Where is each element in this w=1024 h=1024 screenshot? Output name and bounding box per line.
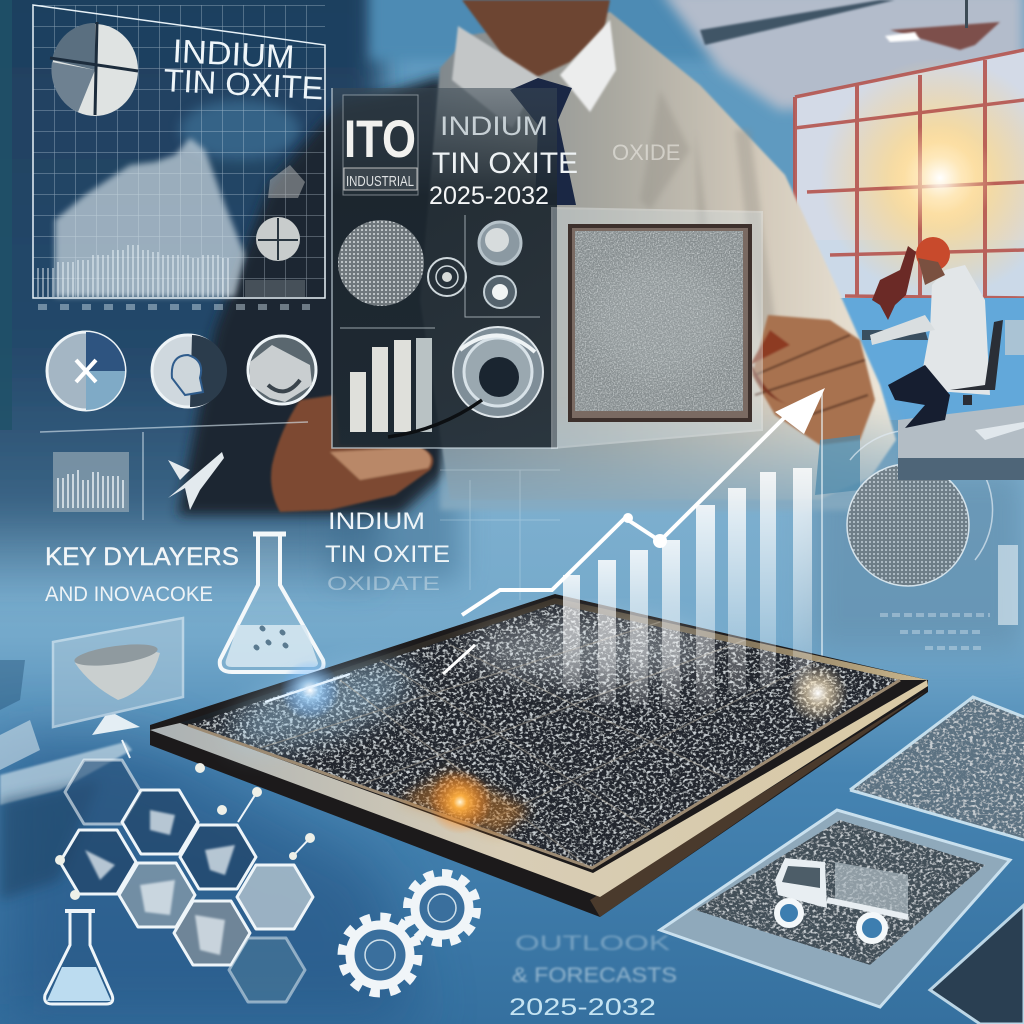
gears bbox=[342, 873, 477, 993]
axis labels bbox=[38, 304, 310, 310]
hexagon sample sketches bbox=[85, 810, 235, 955]
hexagon network bbox=[55, 740, 315, 1002]
central dark panel: TIN OXITE bbox=[432, 147, 578, 180]
pie disc bbox=[50, 22, 138, 116]
dark base bbox=[150, 594, 928, 917]
background researcher with microscope bbox=[862, 237, 1024, 480]
chart area bbox=[55, 138, 245, 297]
man in lab coat bbox=[178, 0, 900, 515]
panel lower right bbox=[930, 905, 1024, 1024]
mid label bbox=[325, 508, 450, 595]
panel upper right bbox=[850, 697, 1024, 840]
sleeve bbox=[870, 315, 935, 345]
mid label: TIN OXITE bbox=[325, 541, 450, 568]
small lenses bbox=[479, 222, 521, 264]
lens bbox=[453, 327, 543, 417]
truck icon bbox=[775, 858, 908, 941]
mid label: OXIDATE bbox=[327, 574, 440, 595]
ITO badge bbox=[343, 95, 418, 195]
key layers heading: KEY DYLAYERS bbox=[45, 543, 239, 571]
shirt collar bbox=[452, 26, 540, 128]
mid label: INDIUM bbox=[328, 508, 425, 535]
panel lines bbox=[340, 215, 540, 328]
left icon row bbox=[47, 332, 316, 410]
small flask bbox=[45, 911, 113, 1004]
cuff bbox=[815, 435, 860, 495]
top rim bbox=[180, 598, 928, 724]
growth chart glass bbox=[440, 390, 822, 680]
left lower panel with thumbnails bbox=[40, 422, 308, 520]
screen bbox=[188, 604, 900, 868]
chair bbox=[950, 320, 1003, 405]
person head bbox=[916, 237, 950, 271]
beige rim bbox=[150, 680, 928, 897]
panel truck inner bbox=[695, 820, 985, 965]
sleeve icon bbox=[245, 165, 305, 297]
central dark panel: 2025-2032 bbox=[429, 182, 549, 210]
lower hand holding stylus bbox=[271, 395, 433, 512]
outlook text bbox=[509, 932, 677, 1021]
outlook text: 2025-2032 bbox=[509, 994, 656, 1021]
outlook text: & FORECASTS bbox=[512, 964, 677, 987]
title: INDIUM bbox=[440, 111, 548, 141]
microscope bbox=[872, 246, 916, 320]
coat fold shading bbox=[640, 90, 775, 340]
plate blotch bbox=[590, 260, 730, 380]
dense bars bbox=[38, 245, 228, 297]
person body bbox=[918, 265, 990, 395]
left data panel grid chart bbox=[33, 5, 325, 307]
screen rim inner bbox=[188, 680, 900, 868]
fourth bar bbox=[416, 338, 432, 432]
stylus bbox=[388, 400, 482, 437]
tablet device bbox=[150, 594, 928, 917]
right mesh circle bbox=[847, 430, 993, 586]
screen light left bbox=[220, 645, 420, 765]
key layers heading bbox=[45, 543, 239, 606]
ITO sample glass plate bbox=[552, 208, 762, 448]
bar chart bbox=[350, 340, 411, 432]
mesh disc bbox=[338, 220, 424, 306]
flask bbox=[220, 534, 324, 672]
screen light centre bbox=[470, 618, 710, 682]
lens flares bbox=[265, 660, 848, 834]
heading: INDIUM bbox=[172, 32, 295, 75]
hazy lower coat fade bbox=[440, 400, 900, 510]
right side tube and faint formulas bbox=[880, 545, 1018, 648]
left lower strips bbox=[0, 660, 132, 900]
bottom edge right bbox=[590, 690, 928, 917]
left data panel grid chart: TIN OXITE bbox=[163, 62, 324, 106]
outlook text: OUTLOOK bbox=[515, 932, 670, 955]
central dark panel: OXIDE bbox=[612, 140, 680, 165]
skin neck and chin bbox=[462, 0, 610, 78]
key layers heading: AND INOVACOKE bbox=[45, 583, 213, 606]
right lower panels bbox=[660, 697, 1024, 1024]
central dark panel bbox=[332, 88, 680, 448]
growth arrow line bbox=[443, 388, 825, 674]
ITO badge: INDUSTRIAL bbox=[346, 173, 414, 190]
panel truck bbox=[660, 810, 1010, 1007]
tie bbox=[510, 78, 576, 205]
screen cell lines bbox=[260, 622, 820, 868]
collar right bbox=[560, 20, 616, 112]
window with red frames bbox=[700, 0, 1024, 420]
upper right hand bbox=[750, 315, 875, 445]
ITO badge: ITO bbox=[344, 110, 416, 169]
warm corner bbox=[400, 770, 530, 835]
panel upper right outline bbox=[850, 697, 1024, 840]
monitor dish bbox=[53, 618, 183, 735]
chart bars bbox=[563, 468, 812, 710]
person legs bbox=[888, 365, 950, 428]
